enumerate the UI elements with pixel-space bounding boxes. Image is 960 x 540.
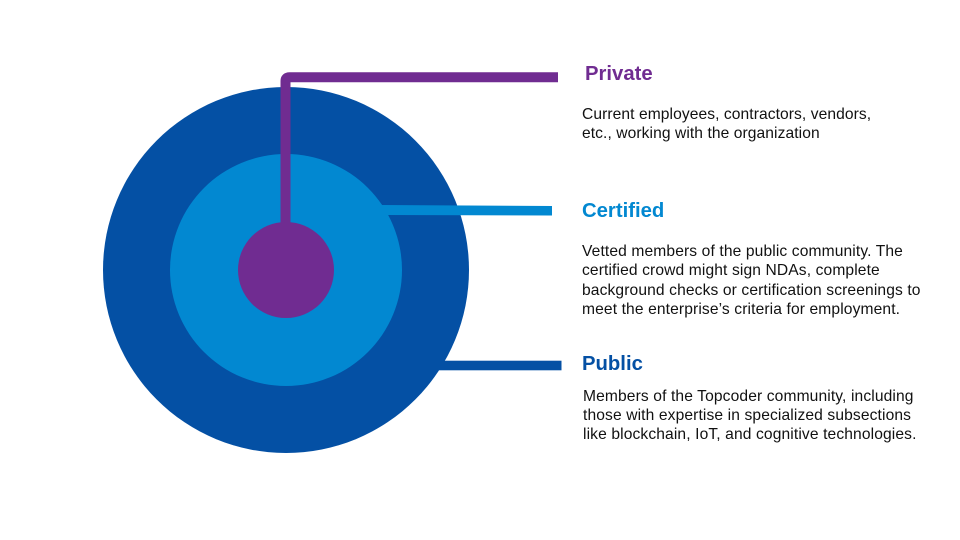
text: public description: like blockchain, IoT, and cognitive technologies. bbox=[583, 426, 917, 443]
text: public description: those with expertise in specialized subsections bbox=[583, 407, 911, 424]
outer circle: public bbox=[103, 87, 469, 453]
text: certified description bbox=[582, 243, 921, 318]
text: certified description: Vetted members of the public community. The bbox=[582, 243, 903, 260]
connector: certified bbox=[381, 205, 552, 216]
connector: private bbox=[286, 77, 558, 240]
text: certified description: certified crowd might sign NDAs, complete bbox=[582, 262, 880, 279]
inner circle: private bbox=[238, 222, 334, 318]
connector: public bbox=[436, 361, 562, 370]
middle circle: certified bbox=[170, 154, 402, 386]
heading: private: Private bbox=[585, 63, 653, 85]
text: private description: Current employees, contractors, vendors, bbox=[582, 106, 871, 123]
heading: public: Public bbox=[582, 353, 643, 375]
heading: certified: Certified bbox=[582, 200, 664, 222]
text: private description bbox=[582, 106, 871, 142]
text: private description: etc., working with the organization bbox=[582, 125, 820, 142]
text: public description bbox=[583, 388, 917, 443]
text: certified description: meet the enterprise’s criteria for employment. bbox=[582, 301, 900, 318]
text: certified description: background checks or certification screenings to bbox=[582, 282, 921, 299]
text: public description: Members of the Topcoder community, including bbox=[583, 388, 914, 404]
